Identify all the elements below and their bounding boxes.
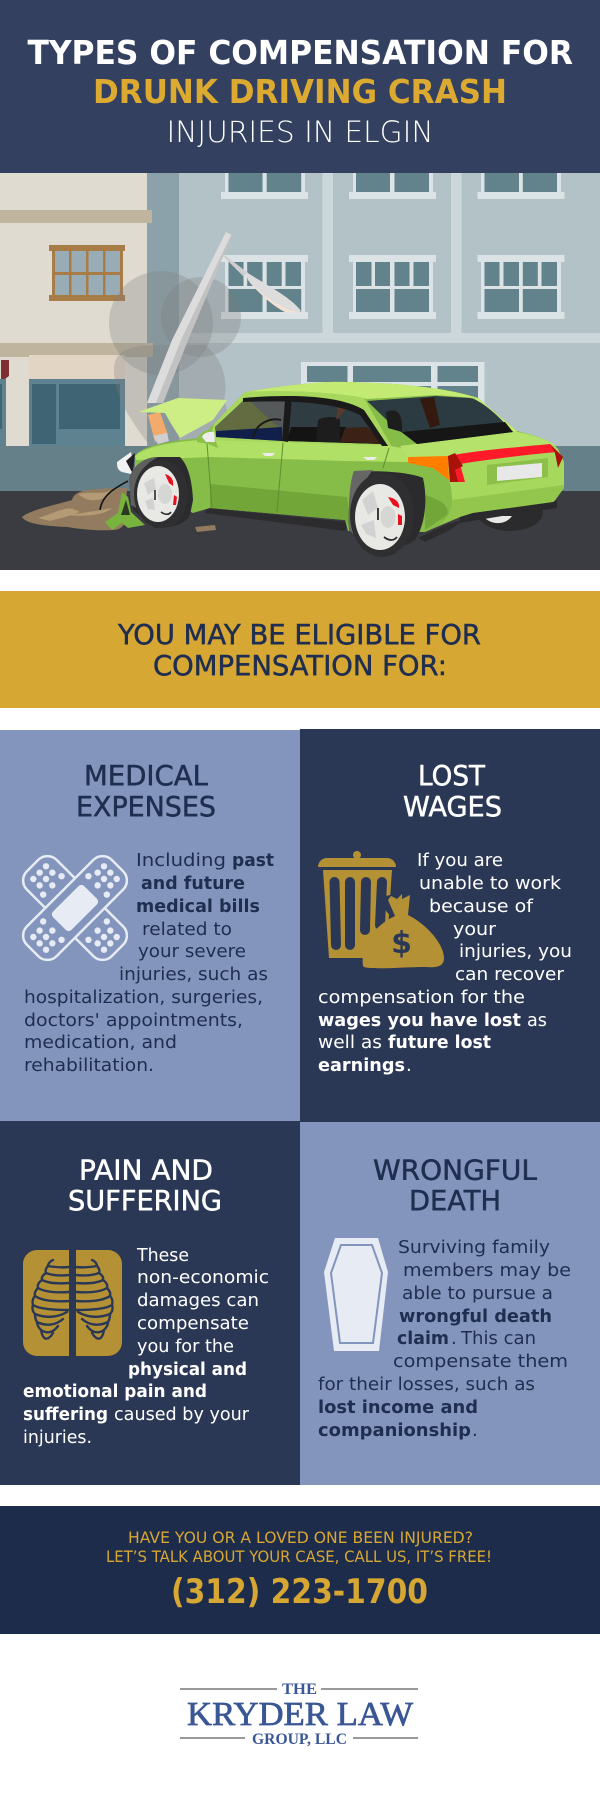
text: medical expenses body: past — [232, 850, 274, 871]
text: pain and suffering body: These — [136, 1245, 189, 1266]
car — [100, 382, 564, 557]
fluid puddle — [22, 488, 216, 532]
rear window — [367, 396, 513, 444]
a-pillar and window surround — [208, 391, 392, 447]
license plate — [487, 458, 548, 485]
text: lost wages body: compensation for the — [318, 987, 525, 1008]
heading: medical expenses: MEDICAL — [84, 760, 209, 792]
text: pain and suffering body: compensate — [137, 1313, 249, 1334]
rear face — [410, 431, 564, 500]
text: wrongful death body: wrongful death — [399, 1306, 552, 1327]
text: lost wages body: future lost — [388, 1032, 491, 1053]
dollar sign on bag: $ — [391, 926, 412, 961]
panel: lost wages — [300, 729, 600, 1122]
text: medical expenses body: medication, and — [24, 1032, 177, 1053]
title line 3: INJURIES IN ELGIN — [166, 115, 434, 149]
text: lost wages body — [318, 850, 572, 1076]
heading: pain and suffering: SUFFERING — [68, 1185, 222, 1217]
text: medical expenses body: and future — [141, 873, 245, 894]
left building — [0, 173, 153, 446]
call to action line 2: LET’S TALK ABOUT YOUR CASE, CALL US, IT’S FREE! — [106, 1547, 492, 1566]
lamp post — [147, 232, 301, 403]
rear bumper — [460, 500, 557, 523]
text: pain and suffering body: injuries. — [23, 1427, 92, 1448]
front wheel arch — [129, 457, 193, 528]
heading: wrongful death: WRONGFUL — [373, 1154, 538, 1186]
road — [0, 491, 600, 570]
middle row windows — [221, 255, 564, 319]
text: wrongful death body: able to pursue a — [402, 1283, 553, 1304]
text: pain and suffering body — [23, 1245, 269, 1448]
door seams — [207, 443, 389, 512]
text: medical expenses body: related to — [142, 919, 232, 940]
tail light bar — [448, 444, 557, 482]
ground floor window — [301, 362, 484, 447]
front door window — [287, 401, 384, 444]
text: lost wages body: can recover — [455, 964, 565, 985]
text: wrongful death body: . — [472, 1420, 478, 1441]
body — [135, 382, 564, 532]
raised hood underside strut — [148, 412, 168, 442]
text: wrongful death body: lost income and — [318, 1397, 478, 1418]
mirror — [197, 429, 218, 448]
text: wrongful death body — [318, 1237, 571, 1441]
text: wrongful death body: . — [451, 1328, 457, 1349]
text: lost wages body: wages you have lost — [318, 1010, 521, 1031]
fender and belt highlight — [135, 440, 450, 462]
text: medical expenses body: medical bills — [136, 896, 260, 917]
text: medical expenses body: your severe — [138, 941, 246, 962]
heading: pain and suffering — [68, 1154, 222, 1217]
title line 2: DRUNK DRIVING CRASH — [93, 72, 507, 111]
title line 1: TYPES OF COMPENSATION FOR — [28, 33, 573, 72]
far rear wheel — [477, 493, 543, 531]
text: wrongful death body: for their losses, such as — [318, 1374, 535, 1395]
heading: wrongful death — [373, 1154, 538, 1217]
text: medical expenses body: Including — [136, 850, 226, 871]
indicator light — [408, 456, 449, 480]
front wheel — [134, 460, 188, 528]
text: medical expenses body — [24, 850, 274, 1076]
heading: wrongful death: DEATH — [409, 1185, 501, 1217]
sidewalk — [0, 446, 600, 491]
heading: lost wages — [403, 760, 502, 823]
text: wrongful death body: companionship — [318, 1420, 471, 1441]
lower doors shade — [210, 484, 352, 531]
windshield — [215, 401, 287, 441]
text: lost wages body: unable to work — [419, 873, 562, 894]
text: medical expenses body: rehabilitation. — [24, 1055, 154, 1076]
banner: you may be eligible — [0, 591, 600, 708]
text: medical expenses body: hospitalization, surgeries, — [24, 987, 263, 1008]
heading: lost wages: LOST — [418, 760, 485, 792]
heading: lost wages: WAGES — [403, 791, 502, 823]
header: title banner — [0, 0, 600, 173]
heading: medical expenses: EXPENSES — [76, 791, 216, 823]
text: pain and suffering body: emotional pain and — [23, 1381, 207, 1402]
text: medical expenses body: injuries, such as — [119, 964, 268, 985]
text: lost wages body: well as — [318, 1032, 382, 1053]
panel: medical expenses — [0, 730, 300, 1121]
text: pain and suffering body: caused by your — [114, 1404, 250, 1425]
text: lost wages body: If you are — [417, 850, 503, 871]
front light — [117, 452, 135, 475]
illustration: car crashed into a lamp post on a city street — [0, 173, 600, 570]
text: wrongful death body: Surviving family — [398, 1237, 550, 1258]
logo: the kryder law group: KRYDER LAW — [187, 1696, 414, 1733]
text: wrongful death body: members may be — [403, 1260, 571, 1281]
panel: wrongful death — [300, 1122, 600, 1485]
text: wrongful death body: This can — [460, 1328, 536, 1349]
text: lost wages body: as — [527, 1010, 547, 1031]
text: pain and suffering body: you for the — [137, 1336, 234, 1357]
text: pain and suffering body: damages can — [137, 1290, 259, 1311]
phone number: (312) 223-1700 — [171, 1572, 428, 1612]
call to action band — [0, 1506, 600, 1634]
banner line 1: YOU MAY BE ELIGIBLE FOR — [117, 619, 481, 651]
text: pain and suffering body: physical and — [128, 1359, 247, 1380]
roof — [245, 382, 517, 432]
text: lost wages body: because of — [429, 896, 534, 917]
text: pain and suffering body: non-economic — [137, 1267, 269, 1288]
banner line 2: COMPENSATION FOR: — [153, 650, 447, 682]
text: lost wages body: earnings — [318, 1055, 405, 1076]
rear wheel arch — [349, 471, 425, 549]
rear wheel — [350, 473, 414, 557]
icon: rib cage — [23, 1250, 122, 1356]
heading: medical expenses — [76, 760, 216, 823]
heading: pain and suffering: PAIN AND — [79, 1154, 213, 1186]
shopfront — [29, 355, 125, 379]
logo: the kryder law group — [180, 1681, 418, 1748]
text: wrongful death body: compensate them — [393, 1351, 568, 1372]
text: medical expenses body: doctors' appointments, — [24, 1010, 243, 1031]
logo: the kryder law group: THE — [282, 1681, 317, 1698]
wires and debris — [100, 481, 128, 510]
panel: pain and suffering — [0, 1121, 300, 1485]
text: pain and suffering body: suffering — [23, 1404, 108, 1425]
raised hood — [138, 398, 227, 438]
smoke — [109, 271, 241, 446]
text: lost wages body: injuries, you — [459, 941, 572, 962]
text: lost wages body: your — [453, 919, 497, 940]
main building — [147, 173, 600, 447]
icon: crossed bandages — [18, 851, 132, 965]
upstairs window — [52, 247, 122, 299]
top row windows — [221, 173, 564, 199]
icon: trash can with money bag — [318, 851, 444, 968]
under-car shadow — [205, 508, 465, 542]
text: lost wages body: . — [406, 1055, 412, 1076]
text: wrongful death body: claim — [397, 1328, 449, 1349]
call to action line 1: HAVE YOU OR A LOVED ONE BEEN INJURED? — [128, 1528, 473, 1547]
icon: coffin — [324, 1238, 388, 1351]
logo: the kryder law group: GROUP, LLC — [252, 1731, 347, 1748]
